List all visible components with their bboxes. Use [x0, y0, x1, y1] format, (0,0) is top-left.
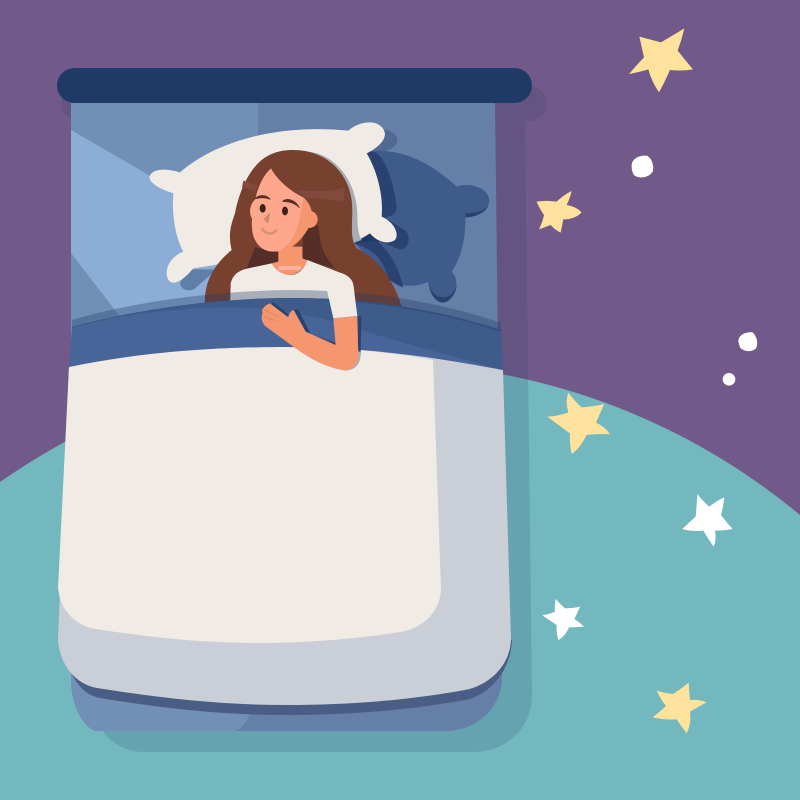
headboard [57, 68, 532, 103]
face [250, 168, 312, 252]
back pillow shadow from white pillow [353, 152, 409, 287]
back pillow [353, 151, 489, 297]
bed cast shadow [61, 86, 546, 752]
dark wedge under pillow [353, 233, 380, 243]
yellow star small [537, 191, 582, 233]
bed base left light panel [71, 103, 258, 731]
arm and sleeve [262, 273, 361, 371]
blanket dark fold [72, 298, 503, 370]
eyebrows [256, 196, 299, 208]
white star left [542, 599, 584, 640]
arm and hand shadows [271, 302, 361, 353]
yellow star large [629, 28, 693, 92]
hair highlight [242, 181, 344, 202]
back pillow dark ears [428, 203, 488, 303]
inner dark hair [247, 225, 335, 268]
stars and dots top right [537, 28, 757, 386]
blanket and bedding [58, 290, 512, 715]
blanket translucent edge [72, 290, 501, 332]
yellow star bottom [653, 683, 707, 733]
hair [205, 150, 402, 307]
finger lines [264, 310, 279, 321]
eyes [260, 204, 288, 215]
ear [300, 211, 318, 228]
neck highlight [278, 266, 301, 270]
pillows and upper body [149, 122, 489, 310]
dot three [723, 373, 735, 386]
arm shadow on duvet [343, 352, 361, 371]
stars bottom right [542, 393, 733, 733]
cream duvet fold [58, 347, 441, 643]
face shade [277, 197, 312, 252]
white pillow shadow on beam [180, 269, 217, 290]
neck [272, 247, 308, 275]
sleeve [322, 273, 357, 318]
head shadow on pillow [307, 152, 362, 243]
back pillow translucent shadow ear [373, 129, 397, 155]
yellow star near ground edge [547, 393, 610, 454]
mattress underside [60, 640, 512, 715]
grey duvet [58, 347, 511, 705]
smile [262, 229, 276, 233]
teal ground [0, 363, 800, 800]
blue blanket band [69, 298, 503, 370]
nose [264, 212, 270, 223]
shirt torso [230, 260, 340, 310]
light beam on wall [71, 130, 240, 366]
bed base right [71, 103, 502, 731]
white star right [682, 494, 733, 547]
white pillow [149, 122, 397, 283]
dot two [738, 332, 757, 351]
forearm and hand [262, 303, 358, 370]
dot one [632, 156, 653, 177]
